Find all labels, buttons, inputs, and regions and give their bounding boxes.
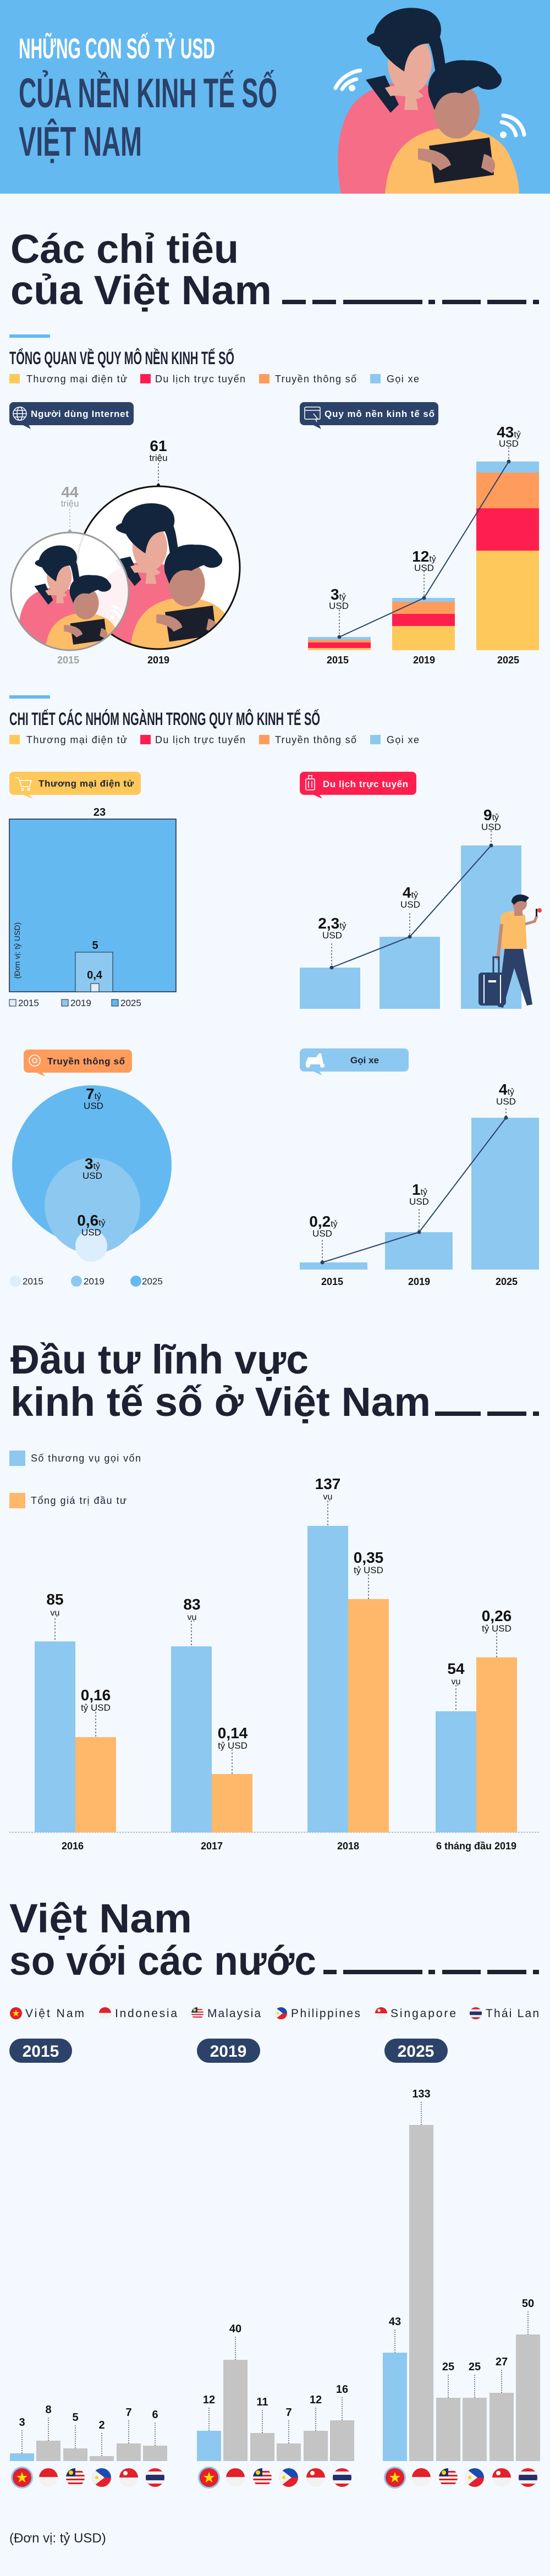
chart: online travel bars: 2,3tỷ	[318, 915, 346, 932]
chart: online travel bars: 4tỷ	[403, 884, 418, 901]
chart: digital media circles: USD	[82, 1171, 102, 1181]
chart: comparison 2015	[10, 2404, 167, 2489]
label: 44 triệu: triệu	[61, 498, 79, 509]
chart: comparison 2019: 11	[256, 2396, 268, 2408]
chart: comparison 2025: 25	[469, 2361, 481, 2373]
labels: values: USD	[329, 601, 349, 611]
chart: comparison 2019	[197, 2323, 354, 2489]
chart: investment grouped bars: tỷ USD	[482, 1623, 512, 1634]
legend: countries: Việt Nam	[25, 2007, 84, 2020]
legend: sectors (overview): Du lịch trực tuyến	[155, 374, 245, 385]
chart: comparison 2019: 7	[285, 2407, 292, 2419]
section heading: Đầu tư lĩnh vực kinh tế số: Đầu tư lĩnh vực	[10, 1337, 309, 1382]
legend: sectors (detail)	[9, 734, 419, 745]
chart: e-commerce nested squares	[9, 806, 176, 1008]
chart: digital media circles: 7tỷ	[86, 1085, 101, 1102]
chart: digital media circles	[10, 1085, 172, 1287]
labels: values: USD	[499, 438, 519, 449]
legend: sectors (detail): Truyền thông số	[275, 734, 356, 745]
legend: sectors (overview): Gọi xe	[387, 374, 419, 385]
chart: comparison 2015: 2	[98, 2419, 105, 2431]
chart: investment grouped bars: 2018	[337, 1841, 359, 1852]
chart: investment grouped bars: 85	[46, 1591, 64, 1608]
label: 61 triệu: triệu	[149, 453, 168, 463]
chart: digital media circles: 3tỷ	[85, 1155, 100, 1172]
icon: globe	[13, 407, 26, 420]
subheading: chi tiết nhóm ngành	[9, 695, 320, 729]
pill: Du lịch trực tuyến	[300, 772, 416, 799]
chart: investment grouped bars: tỷ USD	[354, 1565, 383, 1575]
chart: online travel bars: USD	[481, 822, 501, 832]
chart: investment grouped bars: 0,16	[81, 1687, 111, 1704]
header illustration: people with devices	[336, 8, 524, 194]
chart: online travel bars: 9tỷ	[483, 806, 499, 823]
pill: Người dùng Internet: Người dùng Internet	[31, 409, 129, 419]
labels: values: 43tỷ	[497, 424, 521, 441]
chart: digital media circles: 0,6tỷ	[77, 1212, 106, 1229]
legend: sectors (overview)	[9, 374, 419, 385]
chart: ride hailing bars: USD	[312, 1228, 332, 1239]
chart: internet users circles: 2019	[147, 655, 169, 666]
chart: investment grouped bars: 137	[315, 1475, 340, 1492]
label: 61 triệu	[149, 437, 168, 487]
chart: investment grouped bars: tỷ USD	[218, 1740, 248, 1751]
footnote: unit: (Đơn vị: tỷ USD)	[9, 2531, 106, 2546]
chart: e-commerce nested squares: 0,4	[87, 969, 103, 981]
section heading: Việt Nam so với các nước: Việt Nam	[9, 1896, 192, 1941]
chart: comparison 2015: 7	[125, 2407, 132, 2419]
pill: Quy mô nền kinh tế số	[300, 402, 438, 429]
chart: investment grouped bars: vụ	[188, 1613, 196, 1622]
labels: values: 3tỷ	[331, 586, 346, 603]
legend: years squares: 2015	[18, 998, 39, 1008]
year pills: 2015	[23, 2042, 59, 2061]
chart: comparison 2025: 27	[496, 2356, 508, 2368]
chart: comparison 2015: 3	[19, 2416, 25, 2429]
chart: online travel bars: USD	[400, 899, 420, 910]
year pills: 2019	[210, 2042, 246, 2061]
pill: Truyền thông số: Truyền thông số	[47, 1056, 125, 1067]
title: VIỆT NAM	[19, 118, 142, 164]
chart: ride hailing bars: 0,2tỷ	[309, 1213, 338, 1230]
year pills: 2025	[398, 2042, 434, 2061]
chart: comparison 2019: 12	[203, 2394, 215, 2406]
title	[19, 32, 277, 164]
legend: years circles: 2025	[142, 1276, 163, 1287]
chart: digital media circles: USD	[84, 1101, 103, 1111]
icon: scooter	[305, 1053, 324, 1068]
chart: investment grouped bars: 6 tháng đầu 2019	[436, 1841, 516, 1852]
icon: luggage	[306, 776, 315, 790]
chart: investment grouped bars: tỷ USD	[81, 1702, 111, 1713]
labels: values: USD	[414, 563, 434, 573]
legend: countries: Indonesia	[115, 2007, 177, 2020]
chart: ride hailing bars: USD	[496, 1096, 516, 1107]
header banner	[0, 0, 550, 194]
chart: investment grouped bars: vụ	[452, 1677, 460, 1687]
legend: sectors (detail): Gọi xe	[387, 734, 419, 745]
legend: years squares: 2019	[70, 998, 91, 1008]
chart: comparison 2019: 12	[310, 2394, 322, 2406]
chart: comparison 2025: 25	[442, 2361, 454, 2373]
section heading: Các chỉ tiêu của Việt Nam: Các chỉ tiêu	[10, 226, 239, 272]
title: CỦA NỀN KINH TẾ SỐ	[19, 70, 277, 116]
chart: investment grouped bars: vụ	[323, 1492, 332, 1502]
label: 61 triệu: 61	[150, 437, 167, 454]
icon: cart	[15, 778, 31, 790]
legend: countries: Thái Lan	[486, 2007, 539, 2020]
section heading: Đầu tư lĩnh vực kinh tế số: kinh tế số ở Việt Nam	[10, 1379, 431, 1425]
legend: sectors (overview): Truyền thông số	[275, 374, 356, 385]
pill: Thương mại điện tử: Thương mại điện tử	[38, 778, 134, 789]
icon: at sign	[29, 1055, 40, 1066]
chart: investment grouped bars	[9, 1475, 539, 1852]
chart: comparison 2019: 16	[336, 2383, 348, 2396]
chart: ride hailing bars: 2015	[321, 1276, 343, 1287]
pill: Người dùng Internet	[9, 402, 134, 429]
pill: Truyền thông số	[24, 1050, 132, 1076]
section heading: Các chỉ tiêu của Việt Nam: của Việt Nam	[10, 267, 272, 313]
label: 44 triệu	[61, 484, 79, 533]
chart: internet users circles: 2015	[57, 655, 79, 666]
chart: investment grouped bars: 0,14	[218, 1724, 248, 1742]
chart: digital economy stacked bars: 2019	[413, 655, 435, 666]
section heading: Các chỉ tiêu của Việt Nam	[10, 226, 539, 313]
legend: sectors (overview): Thương mại điện tử	[26, 374, 127, 385]
chart: investment grouped bars: 2017	[201, 1841, 223, 1852]
chart: ride hailing bars: 4tỷ	[499, 1081, 514, 1098]
chart: digital media circles: USD	[81, 1227, 101, 1238]
legend: years squares	[9, 998, 141, 1008]
chart: digital economy stacked bars	[308, 424, 539, 666]
chart: comparison 2015: 5	[72, 2412, 79, 2424]
chart: investment grouped bars: 54	[447, 1660, 465, 1677]
legend: countries: Singapore	[391, 2007, 456, 2020]
pill: Du lịch trực tuyến: Du lịch trực tuyến	[323, 779, 408, 789]
legend: years circles: 2019	[84, 1276, 105, 1287]
legend: countries: Philippines	[291, 2007, 360, 2020]
pill: Quy mô nền kinh tế số: Quy mô nền kinh tế số	[324, 409, 435, 419]
title: NHỮNG CON SỐ TỶ USD	[19, 32, 215, 65]
chart: comparison 2025: 43	[389, 2316, 401, 2328]
legend: sectors (detail): Du lịch trực tuyến	[155, 734, 245, 745]
section heading: Việt Nam so với các nước	[9, 1896, 539, 1984]
legend: countries: Malaysia	[207, 2007, 261, 2020]
subheading: chi tiết nhóm ngành: CHI TIẾT CÁC NHÓM NGÀNH TRONG QUY MÔ KINH TẾ SỐ	[9, 709, 320, 729]
year pills	[9, 2039, 448, 2063]
legend: years circles	[10, 1276, 163, 1287]
label: 44 triệu: 44	[61, 484, 79, 501]
chart: comparison 2015: 6	[152, 2409, 158, 2421]
chart: ride hailing bars	[300, 1081, 539, 1287]
chart: e-commerce nested squares: (Đơn vị: tỷ USD)	[13, 922, 21, 979]
chart: comparison 2025: 133	[412, 2088, 431, 2100]
legend: years circles: 2015	[23, 1276, 43, 1287]
chart: investment grouped bars: 83	[183, 1596, 201, 1613]
chart: investment grouped bars: 0,26	[482, 1607, 512, 1624]
chart: ride hailing bars: 1tỷ	[412, 1181, 427, 1198]
chart: investment grouped bars: 2016	[62, 1841, 84, 1852]
chart: ride hailing bars: 2019	[408, 1276, 430, 1287]
subheading: tổng quan: TỔNG QUAN VỀ QUY MÔ NỀN KINH TẾ SỐ	[9, 348, 234, 368]
chart: digital economy stacked bars: 2025	[497, 655, 519, 666]
legend: sectors (detail): Thương mại điện tử	[26, 734, 127, 745]
chart: comparison 2019: 40	[229, 2323, 241, 2335]
chart: e-commerce nested squares: 23	[94, 806, 106, 819]
legend: investment	[9, 1451, 141, 1508]
section heading: Việt Nam so với các nước: so với các nước	[9, 1938, 316, 1984]
pill: Thương mại điện tử	[9, 772, 141, 799]
legend: countries	[10, 2007, 539, 2020]
chart: online travel bars	[300, 806, 542, 1009]
icon: browser cursor	[305, 407, 320, 422]
chart: comparison 2015: 8	[45, 2404, 52, 2416]
legend: years squares: 2025	[120, 998, 141, 1008]
pill: Gọi xe	[300, 1048, 409, 1075]
chart: e-commerce nested squares: 5	[92, 940, 98, 952]
legend: investment: Số thương vụ gọi vốn	[31, 1453, 141, 1464]
chart: internet users circles	[11, 437, 240, 666]
subheading: tổng quan	[9, 334, 234, 368]
labels: values	[329, 424, 521, 611]
chart: comparison 2025	[383, 2088, 540, 2489]
labels: values: 12tỷ	[412, 548, 436, 565]
chart: comparison 2025: 50	[522, 2298, 534, 2310]
chart: ride hailing bars: USD	[409, 1196, 429, 1207]
chart: online travel bars: USD	[322, 930, 342, 941]
chart: ride hailing bars: 2025	[496, 1276, 518, 1287]
legend: investment: Tổng giá trị đầu tư	[31, 1495, 127, 1506]
pill: Gọi xe: Gọi xe	[350, 1055, 379, 1065]
section heading: Đầu tư lĩnh vực kinh tế số	[10, 1337, 539, 1425]
chart: investment grouped bars: vụ	[51, 1608, 59, 1618]
chart: investment grouped bars: 0,35	[354, 1549, 383, 1566]
icon: traveler with suitcase	[479, 894, 542, 1008]
chart: digital economy stacked bars: 2015	[327, 655, 349, 666]
